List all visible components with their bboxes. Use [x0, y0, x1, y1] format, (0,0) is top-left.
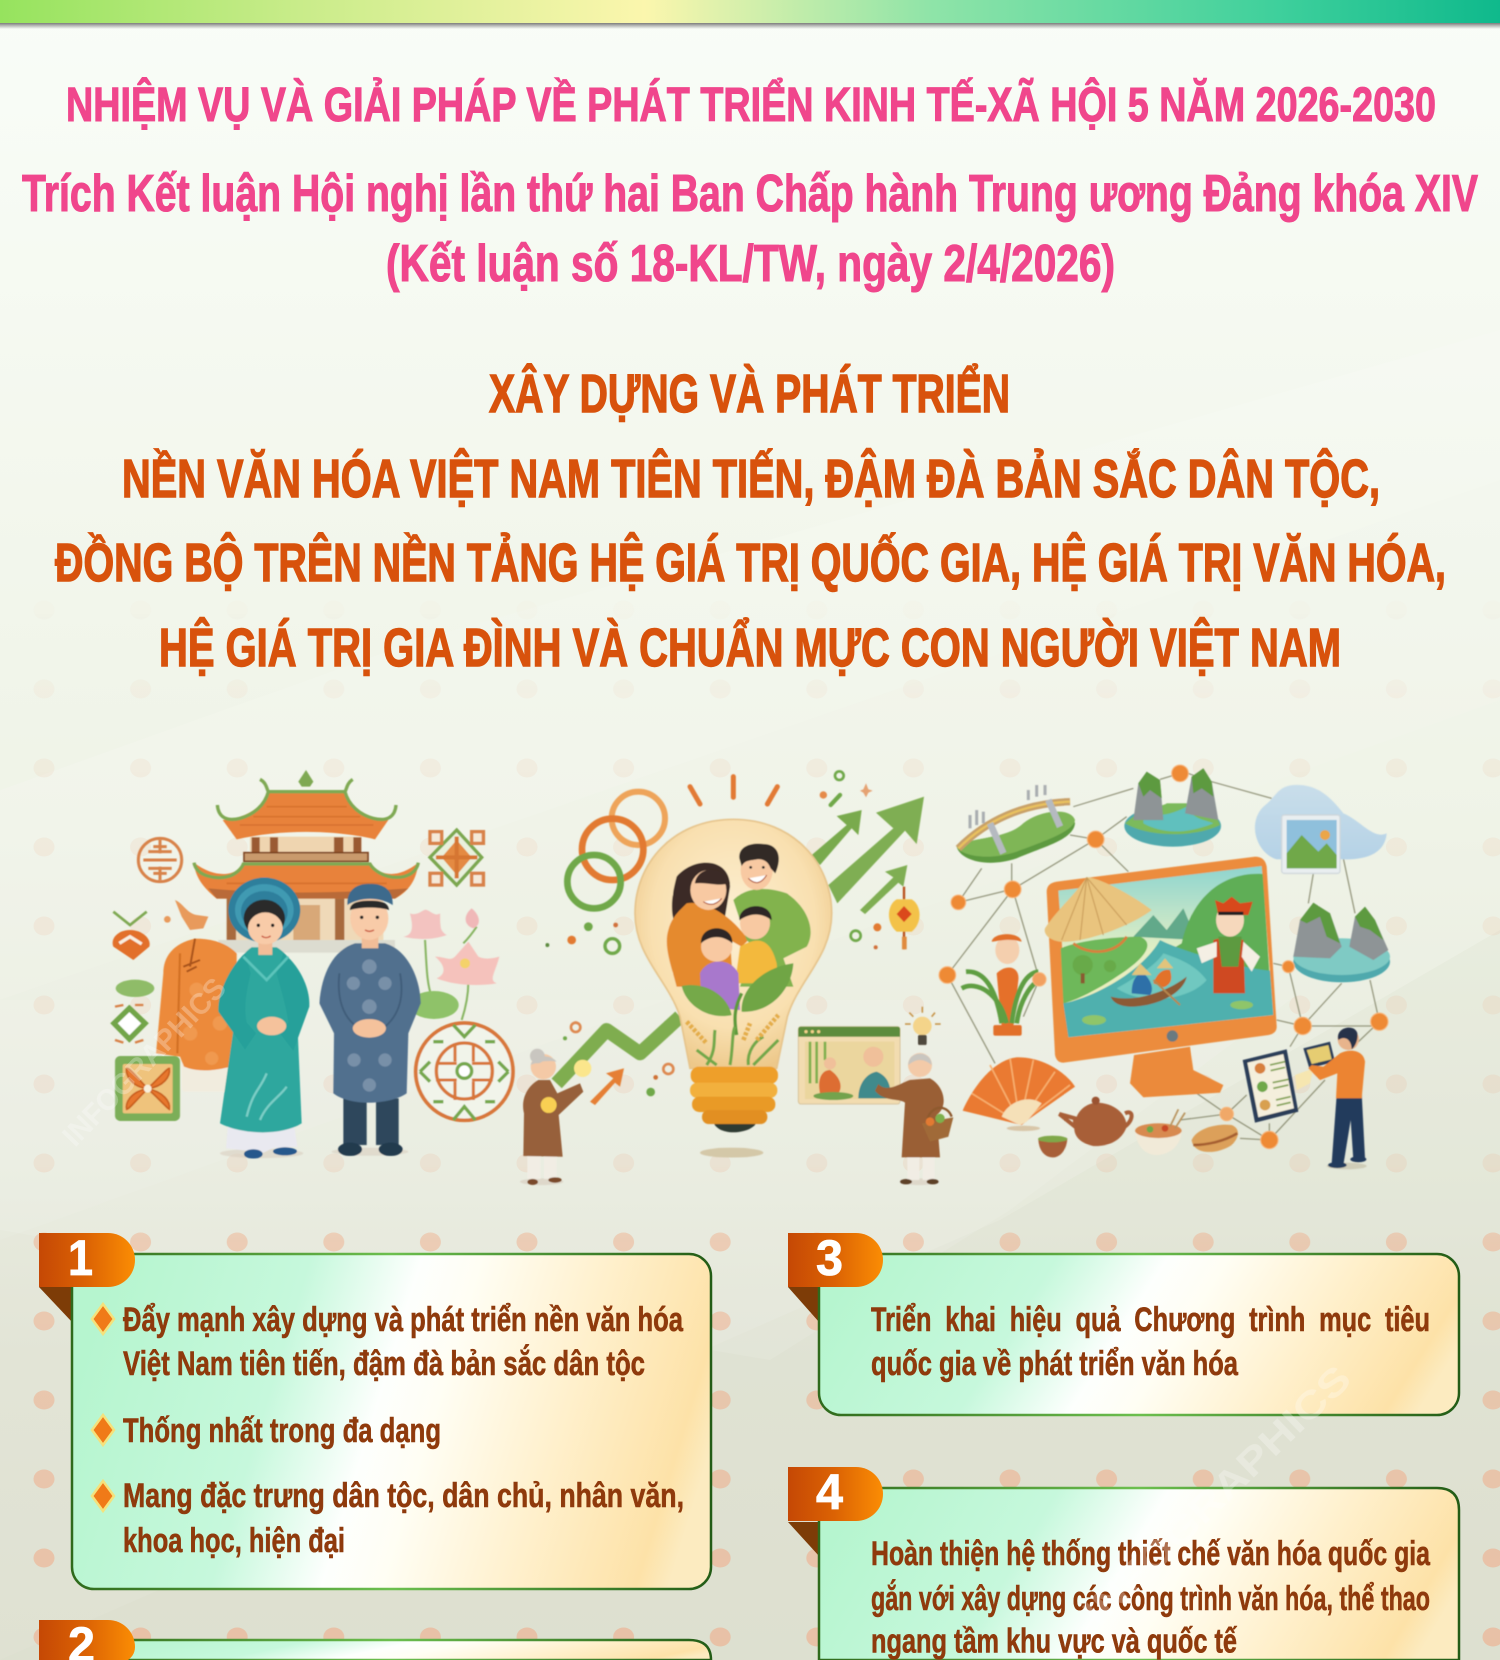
card 4 text: ngang tầm khu vực và quốc tế — [871, 1622, 1237, 1660]
illustration: traditional culture (temple, couple in ao dai, ornaments) — [113, 770, 513, 1159]
icon: orange charm — [113, 900, 208, 960]
icon: man with tablet — [1295, 1028, 1367, 1169]
icon: linked rings — [567, 792, 665, 908]
illustration: family light bulb and growth — [520, 771, 953, 1185]
icon: video window — [798, 1027, 900, 1104]
card 3 text — [871, 1301, 1430, 1383]
card 1 text: Việt Nam tiên tiến, đậm đà bản sắc dân tộc — [123, 1345, 645, 1383]
icon: lotus flowers — [403, 908, 499, 1020]
illustration: digital culture network — [939, 765, 1390, 1169]
network nodes — [939, 765, 1388, 1149]
icon: man in ao dai — [319, 884, 421, 1156]
icon: lantern — [889, 887, 920, 949]
watermark text — [56, 972, 1360, 1634]
icon: water puppet — [1197, 897, 1260, 993]
icon: temple — [194, 770, 418, 953]
icon: orange jacket — [156, 939, 237, 1092]
icon: boat — [1111, 958, 1187, 1007]
icon: knot pattern — [430, 830, 483, 885]
card 1 text: khoa học, hiện đại — [123, 1522, 345, 1560]
main heading: orange: XÂY DỰNG VÀ PHÁT TRIỂN — [489, 363, 1010, 424]
icon: karst island top — [1124, 768, 1221, 847]
card 3 text: quốc gia về phát triển văn hóa — [871, 1345, 1239, 1383]
card 1 text: Đẩy mạnh xây dựng và phát triển nền văn hóa — [123, 1301, 684, 1339]
network lines — [947, 772, 1379, 1140]
panel: card 1 — [39, 1230, 711, 1589]
icon: monitor — [1047, 857, 1277, 1097]
panel: card 4: 4 — [816, 1464, 843, 1520]
icon: light rays and sparkles — [545, 771, 881, 1096]
icon: karst island right — [1293, 903, 1390, 982]
panel: card 2 — [39, 1617, 711, 1660]
icon: square cake ornament — [115, 1056, 180, 1121]
card 1 text: Mang đặc trưng dân tộc, dân chủ, nhân văn, — [123, 1477, 684, 1515]
icon: fan — [963, 1057, 1075, 1131]
icon: round medallion — [416, 1023, 513, 1120]
icon: cloud image — [1255, 785, 1387, 873]
icon: light bulb — [635, 819, 832, 1158]
panel: card 3 — [788, 1230, 1459, 1415]
top gradient band — [0, 0, 1500, 29]
icon: round longevity symbol — [138, 838, 182, 882]
icon: rice-leaf puppet — [962, 934, 1038, 1036]
card 1 text: Thống nhất trong đa dạng — [123, 1412, 441, 1450]
icon: small bulb — [905, 1007, 941, 1045]
icon: checklist tablet — [1243, 1049, 1298, 1123]
icon: family in bulb — [667, 844, 811, 1065]
title: pink headings: (Kết luận số 18-KL/TW, ngày 2/4/2026) — [386, 235, 1115, 293]
icon: bridge island — [957, 785, 1075, 863]
watermark text: INFOGRAPHICS — [1075, 1358, 1360, 1634]
icon: conical hat — [1045, 877, 1152, 952]
card 4 text — [871, 1535, 1431, 1660]
icon: growth arrow — [557, 797, 924, 1105]
icon: teapot and cup — [1038, 1097, 1132, 1157]
watermark text: INFOGRAPHICS — [56, 972, 233, 1153]
icon: woman in ao dai — [218, 878, 309, 1159]
panel: card 3: 3 — [816, 1230, 843, 1286]
badge 1 — [39, 1233, 135, 1287]
card 1 text — [92, 1301, 684, 1560]
icon: green leaf and diamond — [114, 980, 154, 1043]
icon: pho bowl and banh mi — [1135, 1109, 1238, 1155]
panel: card 4 — [788, 1464, 1459, 1660]
icon: elder with light — [520, 1049, 591, 1185]
icon: elder with basket — [875, 1053, 953, 1185]
main heading: orange — [55, 363, 1446, 678]
panel: card 1: 1 — [68, 1230, 93, 1286]
title: pink headings — [22, 77, 1478, 293]
